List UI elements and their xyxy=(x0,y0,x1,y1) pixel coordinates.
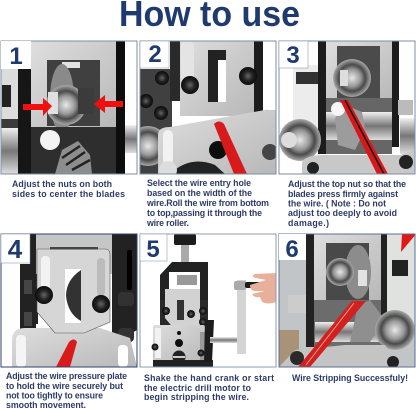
step number 5: 5 xyxy=(146,236,160,263)
caption: step 4: Adjust the wire pressure plate xyxy=(6,371,127,381)
icon: right red arrow xyxy=(94,95,123,113)
panel: step 5 xyxy=(140,234,276,367)
icon: bolts xyxy=(35,286,110,313)
caption: step 2: to top,passing it through the xyxy=(147,208,262,218)
caption: step 2: wire roller. xyxy=(146,218,189,228)
caption: step 1 xyxy=(12,179,125,199)
step number 2 xyxy=(140,41,169,68)
caption: step 2: based on the width of the xyxy=(147,188,252,198)
panel: step 4 xyxy=(1,234,137,367)
caption: step 3: adjust too deeply to avoid xyxy=(288,208,397,218)
caption: step 5 xyxy=(144,373,274,402)
caption: step 4 xyxy=(6,371,127,409)
caption: step 1: sides to center the blades xyxy=(12,189,125,199)
caption: step 1: Adjust the nuts on both xyxy=(12,179,112,189)
step number 1: 1 xyxy=(9,43,23,70)
caption: step 4: not too tightly to ensure xyxy=(6,390,103,400)
red wire xyxy=(298,301,366,367)
caption: step 5: begin stripping the wire. xyxy=(144,392,249,402)
caption: step 2: wire.Roll the wire from bottom xyxy=(146,198,269,208)
caption: step 2: Select the wire entry hole xyxy=(147,178,251,188)
crank shaft xyxy=(210,337,237,343)
icon: left red arrow xyxy=(23,98,52,116)
caption: step 3: the wire. ( Note : Do not xyxy=(288,198,386,208)
caption: step 3: blades press firmly against xyxy=(288,189,398,199)
caption: step 3: damage.) xyxy=(288,218,329,228)
caption: step 6: Wire Stripping Successfuly! xyxy=(292,373,408,383)
caption: step 5: Shake the hand crank or start xyxy=(144,373,274,383)
panel: step 3 xyxy=(279,41,415,174)
red wire xyxy=(56,340,77,367)
step number 2: 2 xyxy=(148,41,162,68)
step number 4: 4 xyxy=(8,234,23,264)
step number 3: 3 xyxy=(286,42,300,69)
panel: step 2 xyxy=(140,40,276,174)
caption: step 5: the electric drill motor to xyxy=(144,383,252,393)
crank arm xyxy=(234,280,261,354)
step number 6: 6 xyxy=(285,236,299,263)
panel: step 6 xyxy=(279,234,416,368)
icon: hand xyxy=(250,273,276,304)
panel: step 1 xyxy=(1,41,137,174)
icon: bolts xyxy=(139,67,257,120)
red wire xyxy=(340,100,388,174)
caption: step 4: to hold the wire securely but xyxy=(6,381,123,391)
caption: step 2 xyxy=(146,178,269,228)
red wire end xyxy=(401,234,414,252)
red wire xyxy=(214,122,247,174)
caption: step 3 xyxy=(288,179,406,228)
machine xyxy=(152,234,214,367)
caption: step 3: Adjust the top nut so that the xyxy=(288,179,406,189)
